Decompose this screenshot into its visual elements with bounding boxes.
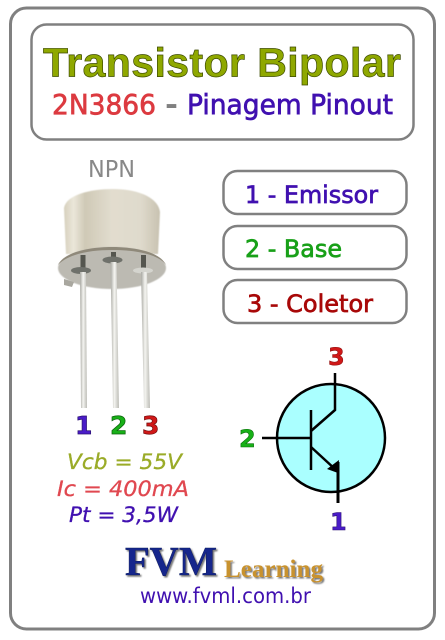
pin numbers below the leads: 3 bbox=[142, 411, 159, 440]
title panel bbox=[32, 24, 414, 140]
heading: Transistor Bipolar: Transistor Bipolar bbox=[43, 40, 401, 86]
logo: FVM Learning: Learning bbox=[224, 556, 323, 583]
lead 2 bbox=[102, 252, 122, 408]
symbol circle bbox=[277, 384, 385, 492]
symbol pin 2: 2 bbox=[239, 425, 256, 453]
subtitle: part number and pinout: 2N3866 bbox=[52, 88, 156, 121]
symbol pin 1: 1 bbox=[330, 508, 347, 536]
legend: 3 Coletor: 3 - Coletor bbox=[247, 290, 373, 318]
Pt: Pt = 3,5W bbox=[69, 503, 179, 527]
transistor photo bbox=[58, 189, 166, 408]
pin numbers below the leads bbox=[75, 411, 159, 440]
pin numbers below the leads: 2 bbox=[110, 411, 127, 440]
flange bbox=[58, 247, 166, 289]
emitter arrowhead bbox=[327, 460, 339, 473]
lead 3 bbox=[133, 255, 153, 408]
pin numbers below the leads: 1 bbox=[75, 411, 92, 440]
Vcb: Vcb = 55V bbox=[67, 450, 184, 474]
legend: 1 Emissor bbox=[224, 171, 406, 214]
label: NPN: NPN bbox=[88, 157, 135, 183]
NPN transistor schematic symbol bbox=[239, 343, 385, 536]
symbol wiring bbox=[262, 373, 338, 503]
lead 1 bbox=[71, 255, 91, 408]
specifications bbox=[57, 450, 189, 527]
Ic: Ic = 400mA bbox=[57, 477, 189, 501]
can body bbox=[64, 189, 160, 254]
logo: FVM Learning: FVM bbox=[125, 538, 217, 584]
subtitle: part number and pinout bbox=[52, 88, 393, 121]
logo: FVM Learning bbox=[125, 538, 323, 584]
legend: 2 Base: 2 - Base bbox=[245, 235, 342, 263]
legend: 3 Coletor bbox=[224, 280, 406, 323]
website url: www.fvml.com.br bbox=[140, 584, 311, 608]
symbol pin 3: 3 bbox=[328, 343, 345, 371]
subtitle: part number and pinout: - bbox=[165, 88, 178, 121]
legend: 1 Emissor: 1 - Emissor bbox=[245, 181, 378, 209]
subtitle: part number and pinout: Pinagem Pinout bbox=[187, 88, 393, 121]
legend: 2 Base bbox=[224, 226, 406, 269]
